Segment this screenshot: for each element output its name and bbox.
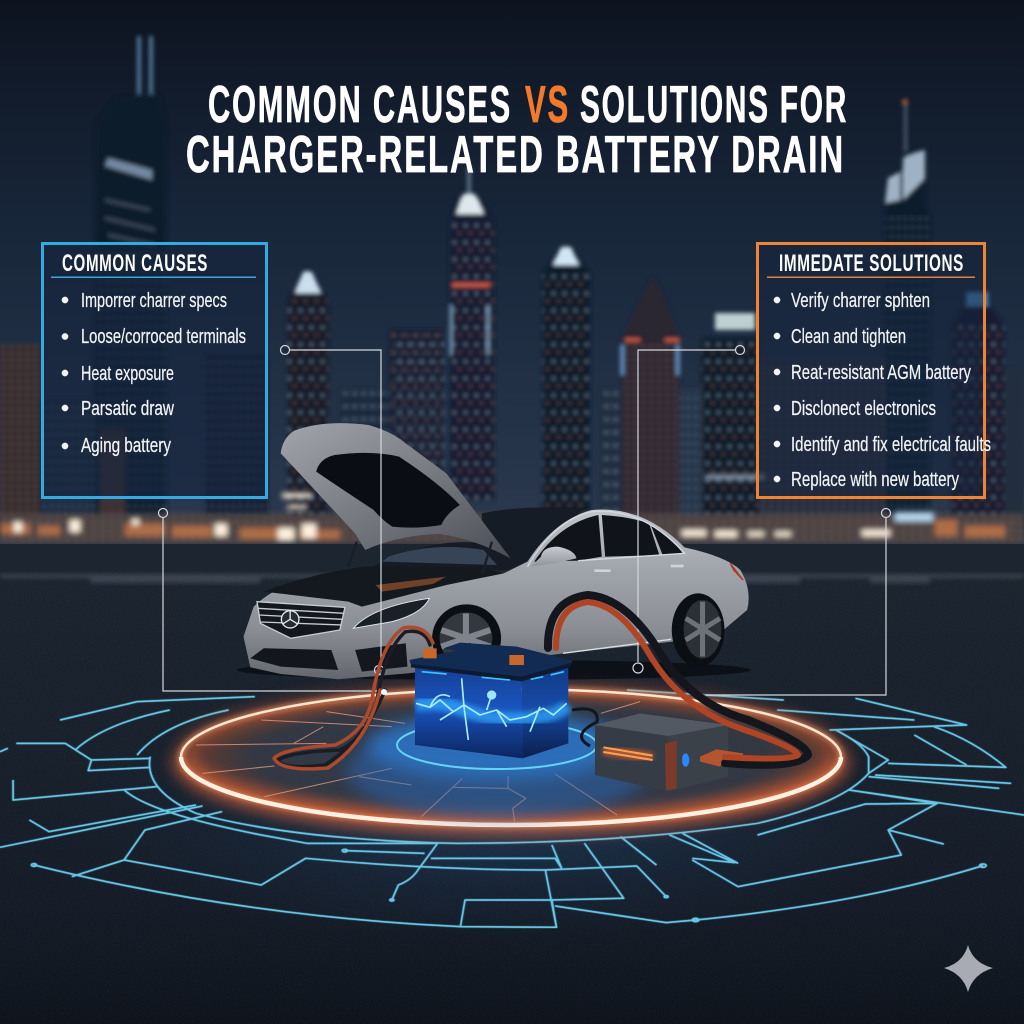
causes list (62, 290, 246, 457)
causes list: Aging battery (81, 435, 171, 457)
charger right face (668, 725, 728, 792)
car: silver sedan with open hood (237, 423, 751, 680)
left causes leader (163, 518, 385, 691)
solutions list: Replace with new battery (791, 469, 959, 491)
charger box (595, 713, 743, 792)
causes list: Loose/corroced terminals (81, 326, 246, 348)
car side windows (534, 515, 683, 562)
car body (244, 509, 749, 679)
car badge (281, 611, 299, 628)
glowing charging ring (181, 689, 841, 825)
right cable black strand (548, 595, 808, 765)
charger orange light bars (603, 747, 653, 760)
side sill chrome (563, 639, 671, 653)
causes list: Heat exposure (81, 363, 174, 385)
title: VS (525, 76, 570, 134)
right solutions leader (706, 518, 886, 695)
charger orange glow (603, 750, 653, 758)
car shadow (237, 660, 751, 680)
front wheel (432, 604, 501, 672)
red and black jumper cables (274, 595, 808, 769)
battery front face (415, 665, 523, 758)
car engine bay and dark hood base (264, 567, 504, 607)
battery lid light strips (422, 672, 564, 680)
left cable black strand (278, 631, 430, 767)
window chrome line (527, 511, 685, 567)
windshield reflection (382, 547, 497, 565)
electric arc glow (416, 703, 567, 719)
causes list: Imporrer charrer specs (81, 290, 227, 312)
battery terminals (423, 648, 524, 665)
solutions list: Verify charrer sphten (791, 290, 930, 312)
leader lines with circular markers (158, 346, 890, 695)
battery right face (522, 665, 568, 758)
charger top face (595, 713, 728, 736)
right cable red strand (556, 602, 798, 759)
background: waterfront lights (0, 475, 1024, 544)
solutions list: Disclonect electronics (791, 398, 936, 420)
side mirror (531, 547, 576, 567)
solutions list: Clean and tighten (791, 326, 906, 348)
title: COMMON CAUSES (208, 76, 512, 134)
battery lid (409, 643, 573, 680)
title (186, 76, 848, 184)
battery with electric glow (409, 643, 573, 758)
charger front face (595, 725, 668, 792)
charger blue LED (682, 753, 689, 767)
background: blurred city skyline (0, 36, 1024, 540)
car windshield behind hood (372, 507, 585, 570)
lower bumper intake (250, 648, 338, 670)
right hood leader (638, 350, 735, 662)
background: asphalt ground (0, 573, 1024, 1024)
causes list: Parsatic draw (81, 398, 174, 420)
charger copper side panel (665, 741, 677, 791)
small black charger lead (572, 709, 597, 746)
charger cable clamp (700, 749, 743, 767)
panel: immediate solutions (758, 244, 991, 498)
panel heading: COMMON CAUSES (62, 250, 208, 277)
hood struts (348, 542, 492, 575)
headlight (353, 598, 429, 628)
car open hood (281, 423, 511, 558)
background: dark horizon band (0, 544, 1024, 574)
thin orange floor traces inside ring (196, 702, 640, 822)
circuit lines on ground (0, 690, 1024, 927)
panel: common causes (42, 244, 266, 498)
icon: four-point sparkle (944, 945, 993, 992)
rear wheel (672, 593, 724, 667)
door handles (594, 566, 684, 571)
panel frame (758, 244, 984, 498)
solutions list (774, 290, 991, 491)
panel frame (42, 244, 266, 498)
left hood leader (290, 350, 381, 665)
electric arc (416, 678, 567, 740)
left cable red strand (274, 627, 433, 769)
hood insulation panel (316, 453, 460, 528)
blue glow ring under battery (347, 711, 647, 820)
car front grille (257, 602, 345, 638)
background: night sky (0, 0, 1024, 560)
rear tail light (730, 563, 743, 580)
grille slats (258, 608, 344, 625)
